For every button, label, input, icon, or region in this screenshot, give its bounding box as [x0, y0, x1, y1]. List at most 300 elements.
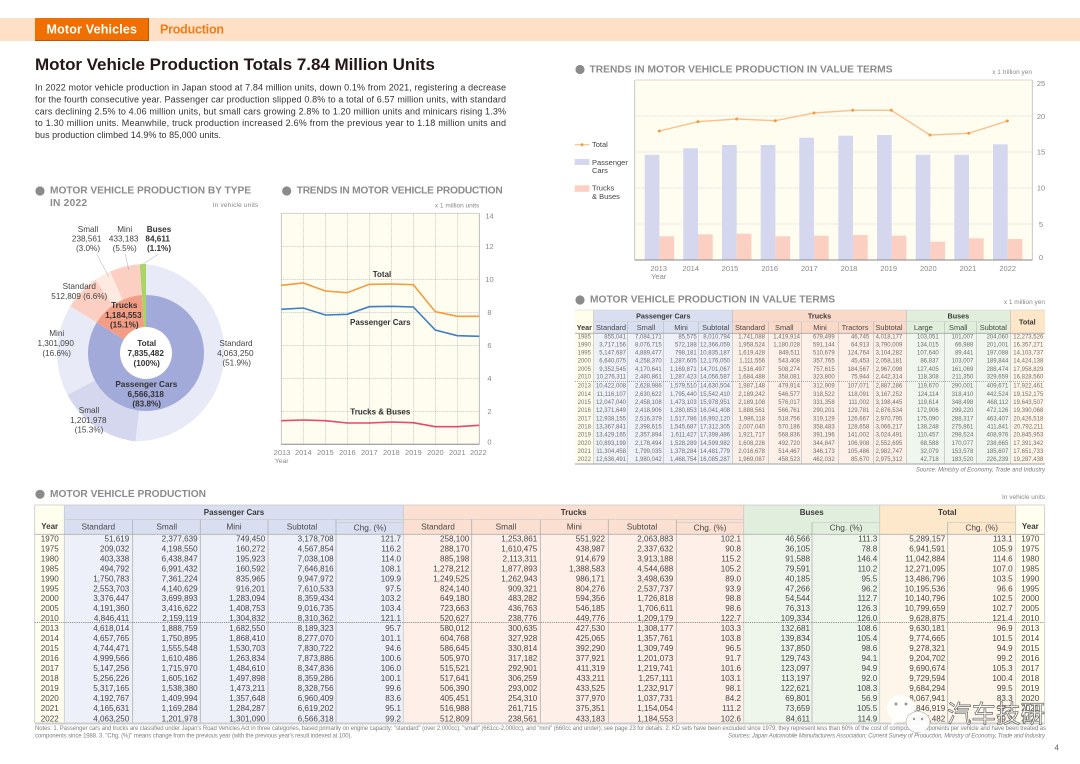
- value table rows: 2,442,314: [876, 374, 903, 380]
- production table rows: 4,192,767: [93, 694, 130, 703]
- value table rows: 2020: [578, 441, 592, 447]
- value table rows: 189,844: [987, 359, 1009, 365]
- value table rows: 128,658: [848, 424, 870, 430]
- value table rows: 463,407: [987, 416, 1009, 422]
- production table rows: 4,165,631: [93, 704, 130, 713]
- production table rows: 1,538,380: [162, 684, 198, 693]
- unit note: line chart: x 1 million units: [435, 202, 480, 210]
- production table rows: 1,184,553: [637, 714, 674, 723]
- production table rows: 1,304,832: [229, 613, 266, 622]
- production table rows: 108.6: [857, 624, 878, 632]
- production table rows: 103.2: [381, 594, 401, 603]
- production table rows: 160,272: [236, 544, 266, 553]
- production table rows: 551,922: [576, 534, 605, 543]
- value table rows: 514,467: [778, 449, 801, 455]
- production table headers: Subtotal: [287, 521, 317, 531]
- value table rows: 591,144: [813, 342, 835, 348]
- label: mini cars: (16.6%): [42, 349, 71, 358]
- production table rows: 505,970: [440, 654, 470, 662]
- production table rows: 916,201: [236, 584, 266, 593]
- production table rows: 126.3: [857, 604, 878, 612]
- label: trucks total: 1,184,553: [105, 311, 142, 320]
- value table rows: 8,076,715: [635, 342, 662, 348]
- value table rows: 2,016,678: [738, 449, 766, 455]
- value table rows: 2014: [578, 392, 592, 398]
- value table rows: 7,084,171: [635, 334, 662, 340]
- value table rows: 510,679: [813, 350, 835, 356]
- production table rows: 93.9: [725, 584, 741, 593]
- production table rows: 2018: [1021, 674, 1040, 682]
- production table rows: 8,359,434: [298, 594, 334, 603]
- value table rows: 17,922,461: [1013, 384, 1044, 390]
- label: standard cars: 4,063,250: [217, 349, 254, 358]
- value table rows: 226,239: [987, 457, 1009, 463]
- production table rows: 2017: [1021, 664, 1040, 672]
- value table rows: 2,970,795: [876, 416, 903, 422]
- production table rows: 835,965: [236, 574, 266, 583]
- value table rows: 1,795,440: [670, 392, 697, 398]
- value table rows: 10,422,008: [596, 384, 627, 390]
- production table rows: 99.6: [385, 684, 401, 693]
- production table rows: 10,140,796: [905, 594, 946, 603]
- unit note: production table: In vehicle units: [1002, 494, 1046, 501]
- value table rows: 1,169,871: [670, 367, 697, 373]
- value table rows: 153,578: [952, 449, 974, 455]
- production table rows: 1,750,783: [93, 574, 130, 583]
- production table rows: 11,042,884: [905, 554, 946, 563]
- production table rows: 79,591: [785, 564, 810, 573]
- production table rows: 1,154,054: [637, 704, 674, 713]
- heading: value table: MOTOR VEHICLE PRODUCTION IN VALUE TERMS: [590, 294, 835, 306]
- production table rows: 121.1: [381, 613, 401, 622]
- value table rows: 197,088: [987, 350, 1009, 356]
- production table rows: 1990: [41, 574, 59, 583]
- value table rows: 12,176,050: [700, 359, 731, 365]
- production table rows: 1,408,753: [229, 604, 266, 612]
- value table rows: 568,836: [778, 433, 801, 439]
- value table rows: 13,367,841: [596, 424, 627, 430]
- production table headers: Chg. (%): [694, 522, 727, 532]
- value table rows: 13,429,165: [596, 433, 627, 439]
- value table rows: 3,790,009: [876, 342, 903, 348]
- production table rows: 126.0: [857, 613, 878, 622]
- production table rows: 96.2: [862, 584, 878, 593]
- value table rows: 119,670: [917, 384, 939, 390]
- production table rows: 114.0: [381, 554, 401, 563]
- value table rows: 757,615: [813, 367, 835, 373]
- production table rows: 1,219,741: [637, 664, 674, 672]
- value table headers: Small: [637, 323, 656, 332]
- value table rows: 2,058,181: [876, 359, 903, 365]
- production table rows: 129,743: [781, 654, 810, 662]
- value table rows: 64,913: [851, 342, 870, 348]
- series labels: Total: [373, 270, 391, 279]
- production table rows: 132,681: [781, 624, 810, 632]
- value table rows: 11,304,458: [596, 449, 627, 455]
- production table rows: 2020: [41, 694, 59, 703]
- label: buses: (1.1%): [147, 244, 171, 253]
- production table rows: 6,991,432: [162, 564, 198, 573]
- production table rows: 10,195,536: [905, 584, 946, 593]
- production table rows: 1,301,090: [229, 714, 266, 723]
- y axis labels: 8: [487, 308, 492, 317]
- value table rows: 14,701,067: [700, 367, 731, 373]
- production table rows: 9,947,972: [298, 574, 334, 583]
- value table rows: 408,976: [987, 433, 1009, 439]
- production table rows: 47,266: [785, 584, 810, 593]
- value table rows: 358,081: [778, 374, 801, 380]
- value table rows: 201,001: [987, 342, 1009, 348]
- value table rows: 46,745: [851, 334, 870, 340]
- value table rows: 3,198,445: [876, 400, 903, 406]
- value table headers: Year: [577, 323, 592, 332]
- x axis labels: Year: [275, 458, 289, 465]
- value table rows: 1995: [578, 350, 592, 356]
- x axis labels: 2019: [880, 264, 897, 273]
- production table rows: 986,171: [576, 574, 605, 583]
- label: mini trucks: (5.5%): [113, 244, 137, 253]
- production table rows: 4,198,550: [162, 544, 198, 553]
- production table headers: Small: [156, 521, 177, 531]
- value table rows: 4,018,177: [876, 334, 903, 340]
- value table rows: 204,060: [987, 334, 1009, 340]
- production table rows: 7,835,482: [909, 714, 946, 723]
- production table rows: 649,180: [440, 594, 470, 603]
- y axis labels: 15: [1037, 148, 1045, 156]
- unit note: value table: x 1 million yen: [1004, 299, 1045, 306]
- production table rows: 98.6: [725, 604, 741, 612]
- production table rows: 9,630,181: [909, 624, 946, 632]
- value table rows: 118,308: [917, 374, 939, 380]
- y axis labels: 14: [485, 212, 494, 220]
- production table rows: 1980: [41, 554, 59, 563]
- production table rows: 110.2: [858, 564, 878, 573]
- production table rows: 98.8: [725, 594, 741, 603]
- production table rows: 2005: [1021, 604, 1040, 612]
- production table rows: 9,278,321: [909, 644, 946, 652]
- value table headers: Tractors: [842, 323, 869, 332]
- label: small trucks: Small: [78, 225, 98, 234]
- header band: [0, 18, 1080, 41]
- label: small cars: (15.3%): [75, 426, 104, 434]
- x axis labels: 2013: [650, 264, 667, 273]
- production table rows: [41, 534, 1040, 723]
- value table rows: 1,517,786: [670, 416, 697, 422]
- label: mini trucks: [109, 225, 139, 253]
- x axis labels: 2019: [405, 448, 422, 457]
- x axis labels: 2021: [449, 448, 466, 457]
- production table rows: 1980: [1021, 554, 1040, 563]
- production table rows: 111.3: [858, 534, 878, 543]
- production table rows: 8,347,836: [298, 664, 334, 672]
- production table headers: Standard: [421, 521, 455, 531]
- production table rows: 261,715: [508, 704, 538, 713]
- value table rows: 127,405: [917, 367, 939, 373]
- value table rows: 1,921,717: [738, 433, 766, 439]
- value table rows: 17,958,829: [1013, 367, 1044, 373]
- value table rows: 1,378,284: [670, 449, 697, 455]
- value table rows: 10,835,187: [700, 350, 731, 356]
- production table rows: 306,259: [508, 674, 538, 682]
- value table rows: 106,908: [848, 441, 870, 447]
- value table rows: 12,047,040: [596, 400, 627, 406]
- donut chart: production by type: [37, 225, 254, 441]
- production table rows: 1,750,895: [162, 634, 198, 642]
- production table rows: 105.4: [857, 634, 878, 642]
- production table rows: 1,253,861: [501, 534, 538, 543]
- production table rows: 377,921: [576, 654, 605, 662]
- value table rows: 124,764: [848, 350, 870, 356]
- value table rows: 1,799,035: [635, 449, 662, 455]
- production table rows: 4,140,629: [162, 584, 198, 593]
- production table rows: 2015: [1021, 644, 1040, 652]
- production table rows: 107.0: [992, 564, 1013, 573]
- production table rows: 411,319: [576, 664, 605, 672]
- value table headers: Large: [914, 323, 933, 332]
- value table rows: 442,524: [987, 392, 1009, 398]
- value table rows: 45,453: [851, 359, 870, 365]
- production table rows: 436,763: [508, 604, 538, 612]
- production table rows: 6,438,847: [162, 554, 198, 563]
- value table rows: 1,287,423: [670, 374, 697, 380]
- production table rows: 1,263,834: [229, 654, 266, 662]
- legend: value chart: Total: [592, 140, 608, 149]
- value table headers: Subtotal: [875, 323, 903, 332]
- value table rows: 2,357,894: [635, 433, 662, 439]
- x axis labels: 2020: [427, 448, 444, 457]
- value table rows: 1,287,605: [670, 359, 697, 365]
- heading: value trends: TRENDS IN MOTOR VEHICLE PRODUCTION IN VALUE TERMS: [590, 64, 893, 76]
- production table headers: [41, 508, 1039, 532]
- value table rows: 1,468,754: [670, 457, 697, 463]
- value table rows: 89,441: [955, 350, 974, 356]
- production table rows: 914,679: [576, 554, 605, 563]
- production table rows: 494,792: [100, 564, 130, 573]
- value table rows: 238,665: [987, 441, 1009, 447]
- production table rows: 7,846,919: [909, 704, 946, 713]
- production table rows: 1,715,970: [162, 664, 198, 672]
- production table rows: 1985: [41, 564, 59, 573]
- production table rows: 7,610,533: [298, 584, 334, 593]
- production table rows: 1990: [1021, 574, 1040, 583]
- production table rows: 101.1: [381, 634, 401, 642]
- production table rows: 91,588: [785, 554, 810, 563]
- value table rows: 2,630,622: [635, 392, 662, 398]
- value table rows: 1,545,687: [670, 424, 697, 430]
- production table rows: 804,276: [576, 584, 605, 593]
- intro paragraph: for the fourth consecutive year. Passenger car production slipped 0.8% to a total of 6.57 million units, with standard: [35, 94, 506, 104]
- value table rows: 572,188: [675, 342, 697, 348]
- value table rows: 32,079: [920, 449, 939, 455]
- production table rows: 137,850: [781, 644, 810, 652]
- label: standard cars: (51.9%): [222, 358, 251, 368]
- value table rows: 172,906: [917, 408, 939, 414]
- production table rows: 99.5: [997, 684, 1013, 693]
- value table rows: 19,287,438: [1013, 457, 1044, 463]
- production table rows: 90.8: [725, 544, 741, 553]
- value table rows: 472,126: [987, 408, 1009, 414]
- production table rows: 54,544: [785, 594, 810, 603]
- line chart: production trends: [274, 212, 494, 465]
- value table rows: 1,180,028: [773, 342, 801, 348]
- value table rows: 2015: [578, 400, 592, 406]
- watermark: 汽车技研: [947, 700, 1045, 728]
- value table rows: 11,116,107: [597, 392, 627, 398]
- value table rows: 319,129: [813, 416, 835, 422]
- value table rows: 1990: [578, 342, 592, 348]
- production table rows: 96.6: [997, 584, 1013, 593]
- value table rows: 1,111,556: [739, 359, 766, 365]
- x axis labels: [650, 264, 1016, 281]
- title: Motor Vehicle Production Totals 7.84 Million Units: [35, 55, 435, 74]
- production table rows: 392,290: [576, 644, 605, 652]
- production table rows: 8,310,362: [298, 613, 334, 622]
- value table rows: 17,651,733: [1013, 449, 1044, 455]
- production table rows: 2021: [1021, 704, 1040, 713]
- production table rows: 101.6: [721, 664, 741, 672]
- value table rows: 16,828,560: [1013, 374, 1044, 380]
- production table headers: Year: [1022, 522, 1039, 531]
- value table rows: 1,608,226: [738, 441, 766, 447]
- production table rows: 1,726,818: [637, 594, 674, 603]
- value table rows: 2005: [578, 367, 592, 373]
- value table rows: 566,761: [778, 408, 801, 414]
- series labels: Passenger Cars: [350, 318, 411, 327]
- value table rows: 323,800: [813, 374, 835, 380]
- production table rows: 1970: [41, 534, 59, 543]
- production table rows: 94.9: [862, 664, 878, 672]
- production table rows: 121.4: [992, 613, 1013, 622]
- value table rows: 570,186: [778, 424, 801, 430]
- value table rows: [578, 334, 1044, 463]
- value table rows: 124,114: [917, 392, 939, 398]
- value table rows: 2022: [578, 457, 592, 463]
- value table rows: 348,498: [952, 400, 974, 406]
- production table rows: 112.7: [858, 594, 878, 603]
- value table rows: 14,630,504: [700, 384, 731, 390]
- x axis labels: 2022: [470, 448, 487, 457]
- value table rows: 111,002: [848, 400, 870, 406]
- production table rows: 2017: [41, 664, 59, 672]
- production table rows: 2,113,311: [502, 554, 538, 563]
- production table rows: 209,032: [100, 544, 130, 553]
- production table rows: 109,334: [781, 613, 810, 622]
- label: small cars: Small: [79, 406, 99, 415]
- production table rows: 327,928: [508, 634, 538, 642]
- production table rows: 4,657,765: [93, 634, 130, 642]
- production table rows: 92.0: [862, 674, 878, 682]
- production table rows: 516,988: [440, 704, 470, 713]
- production table rows: 4,191,360: [93, 604, 130, 612]
- y axis labels: 5: [1039, 220, 1043, 229]
- production table rows: 1,610,475: [501, 544, 538, 553]
- value table headers: Buses: [948, 312, 969, 320]
- production table rows: 1970: [1021, 534, 1040, 543]
- value table rows: 129,781: [848, 408, 870, 414]
- value table headers: Mini: [813, 323, 827, 332]
- value table rows: 288,474: [987, 367, 1009, 373]
- production table rows: 449,776: [576, 613, 605, 622]
- value table rows: 1,986,118: [739, 416, 766, 422]
- production table rows: 4,618,014: [93, 624, 130, 632]
- production table rows: 4,744,471: [93, 644, 130, 652]
- value table rows: 468,112: [987, 400, 1009, 406]
- table: production in value terms: [575, 310, 1045, 464]
- value table rows: 312,909: [813, 384, 835, 390]
- y axis labels: 0: [1039, 253, 1043, 262]
- production table rows: 1,610,486: [162, 654, 198, 662]
- production table rows: 1975: [1021, 544, 1040, 553]
- production table rows: 2,553,703: [93, 584, 130, 593]
- total line: [658, 109, 1009, 136]
- production table rows: 46,566: [785, 534, 810, 543]
- production table rows: 2010: [1021, 613, 1040, 622]
- production table rows: 99.2: [385, 714, 401, 723]
- production table rows: 102.5: [992, 594, 1013, 603]
- page number: 4: [1054, 744, 1059, 752]
- value table rows: 2,418,906: [635, 408, 662, 414]
- production table rows: 8,328,756: [298, 684, 334, 693]
- value table rows: 10,276,311: [596, 374, 627, 380]
- production table rows: 2019: [41, 684, 59, 693]
- production table rows: 36,105: [785, 544, 810, 553]
- value table rows: 3,167,252: [876, 392, 903, 398]
- label: passenger cars: (83.8%): [132, 400, 161, 408]
- label: total: 7,835,482: [127, 349, 164, 358]
- label: passenger cars: [115, 380, 178, 408]
- production table rows: 97.3: [997, 704, 1013, 713]
- unit note: donut: In vehicle units: [213, 202, 259, 209]
- production table rows: 8,189,323: [298, 624, 334, 632]
- production table rows: 405,451: [440, 694, 470, 703]
- value table rows: 299,220: [952, 408, 974, 414]
- y axis labels: 10: [1037, 184, 1045, 192]
- production table rows: 91.7: [725, 654, 741, 662]
- production table headers: Standard: [81, 521, 116, 531]
- production table rows: 512,809: [440, 714, 470, 723]
- production table rows: 3,416,622: [162, 604, 198, 612]
- value table rows: 798,181: [675, 350, 697, 356]
- value table rows: 101,007: [952, 334, 974, 340]
- value table rows: 2,516,379: [635, 416, 662, 422]
- production table rows: 1,262,943: [501, 574, 538, 583]
- production table rows: 9,729,594: [909, 674, 946, 682]
- production table rows: 2,063,883: [637, 534, 674, 543]
- x axis labels: 2014: [295, 448, 312, 457]
- value table rows: 170,077: [952, 441, 974, 447]
- icon: chat bubbles: [887, 695, 930, 735]
- value table rows: 2,628,986: [635, 384, 662, 390]
- production table rows: 5,256,226: [93, 674, 130, 682]
- value table rows: 19,390,068: [1013, 408, 1044, 414]
- production table rows: 1,283,094: [229, 594, 266, 603]
- value table rows: 1,987,148: [738, 384, 766, 390]
- production table rows: 195,923: [236, 554, 266, 563]
- value table rows: 12,273,526: [1013, 334, 1044, 340]
- production table rows: 2000: [1021, 594, 1040, 603]
- value table rows: 492,720: [778, 441, 801, 447]
- value table rows: 2,458,108: [635, 400, 662, 406]
- value table rows: 16,041,408: [700, 408, 731, 414]
- production table rows: 69,801: [785, 694, 810, 703]
- production table rows: 2013: [41, 624, 59, 632]
- production table rows: 102.6: [721, 714, 741, 723]
- production table rows: 2000: [41, 594, 59, 603]
- production table rows: 885,198: [440, 554, 470, 563]
- production table rows: 377,970: [576, 694, 605, 703]
- production table rows: 1,201,073: [637, 654, 674, 662]
- production table headers: Chg. (%): [354, 522, 387, 532]
